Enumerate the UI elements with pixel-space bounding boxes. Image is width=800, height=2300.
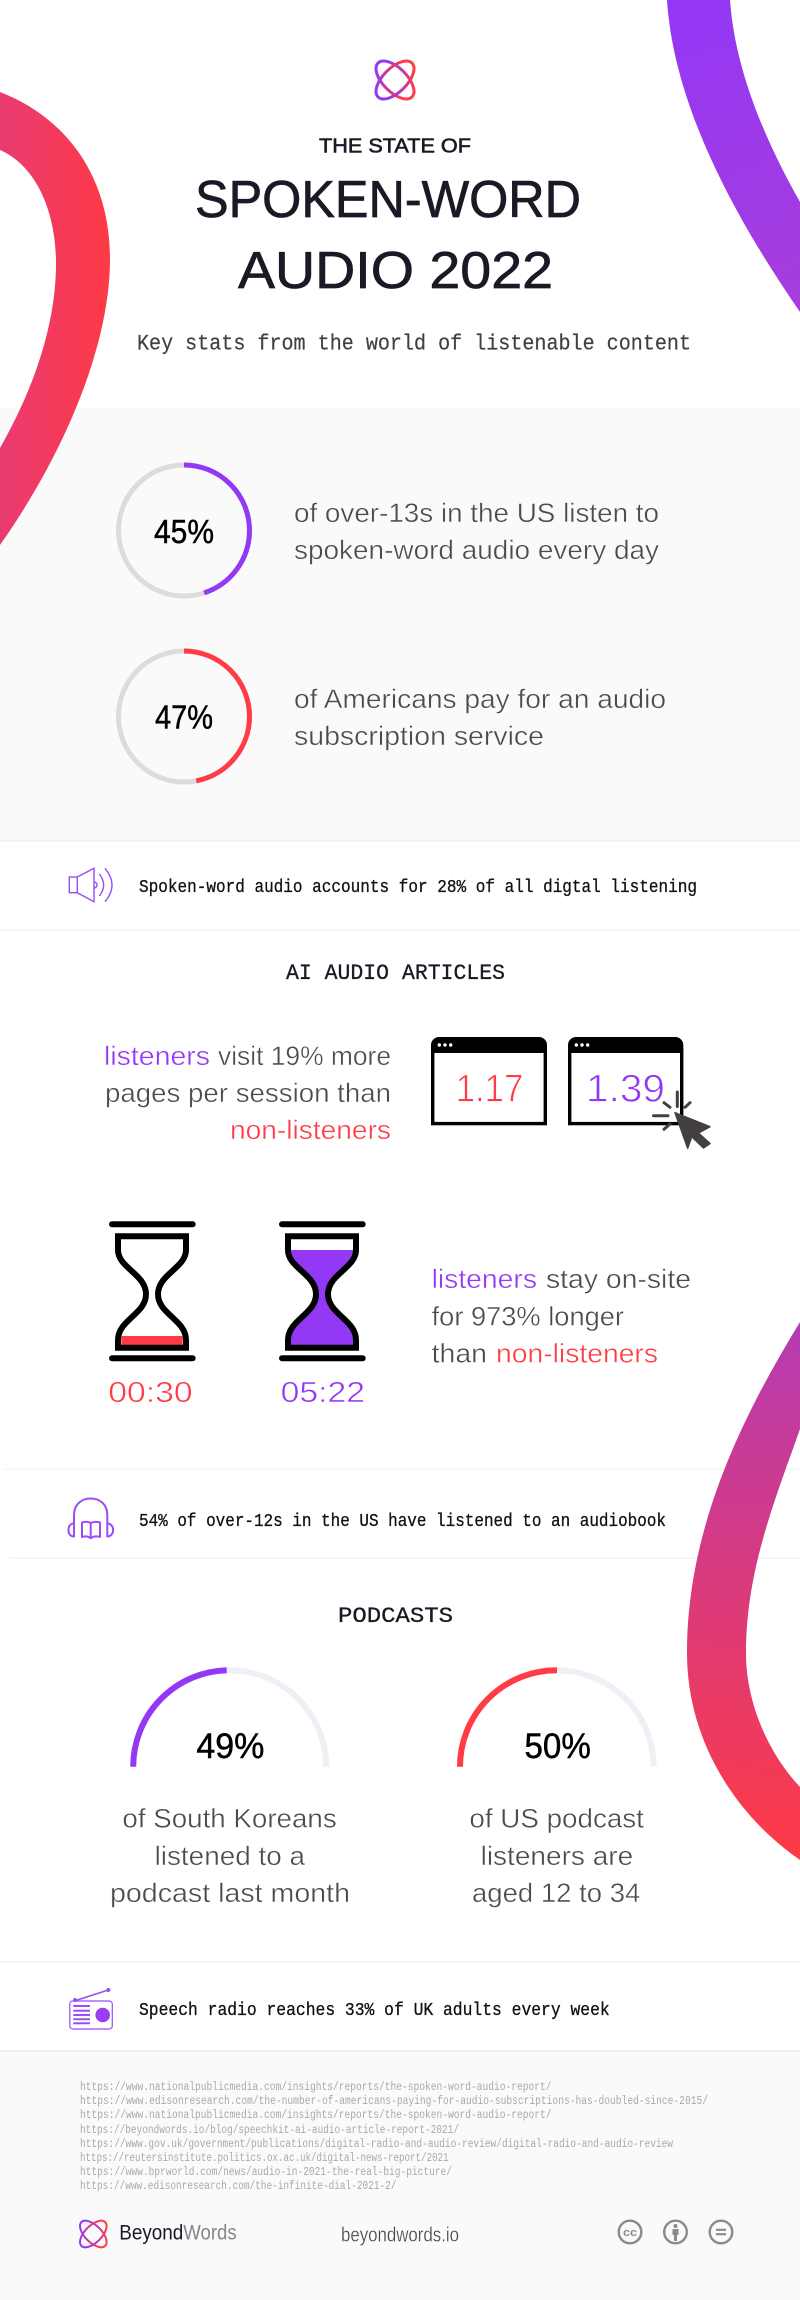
text: 47% description [294, 684, 666, 751]
text: pages per session: non-listeners [230, 1115, 391, 1145]
text: sources: https://www.gov.uk/government/publications/digital-radio-and-audio-review/digital-radio-and-audio-review [80, 2138, 673, 2151]
text: time on site [432, 1264, 691, 1369]
text: pages per session: listeners [104, 1041, 210, 1071]
text: 45% description: spoken-word audio every day [294, 535, 660, 565]
heading: podcasts: PODCASTS [338, 1604, 453, 1629]
icon: browser window 1.17: 1.17 [456, 1068, 523, 1111]
icon: hourglass red [112, 1224, 193, 1358]
icon: headphones book [68, 1498, 113, 1538]
text: 50% description: of US podcast [469, 1804, 645, 1834]
donut: 47% [118, 651, 250, 782]
text: sources: https://www.nationalpublicmedia.com/insights/reports/the-spoken-word-audio-report/ [80, 2109, 552, 2122]
panel: daily stats [118, 465, 666, 782]
text: 45% description: of over-13s in the US listen to [294, 498, 659, 528]
text: 50% description [469, 1804, 645, 1908]
text: 49% description [110, 1804, 350, 1908]
callout: digital listening [69, 868, 697, 902]
title: THE STATE OF [319, 134, 471, 158]
title [195, 134, 581, 300]
footer website: beyondwords.io [341, 2225, 459, 2247]
icon: hourglass purple [282, 1224, 363, 1358]
text: time on site: for 973% longer [432, 1302, 624, 1332]
gauge: 49% [133, 1670, 326, 1767]
text: 50% description: listeners are [481, 1841, 633, 1871]
text: 47% description: of Americans pay for an audio [294, 684, 666, 714]
label: 00:30: 00:30 [108, 1377, 193, 1409]
text: sources: https://www.bprworld.com/news/audio-in-2021-the-real-big-picture/ [80, 2166, 452, 2179]
callout: speech radio [70, 1988, 610, 2029]
icons: creative commons licence [619, 2221, 732, 2243]
callout: digital listening: Spoken-word audio accounts for 28% of all digtal listening [139, 877, 697, 898]
text: 49% description: podcast last month [110, 1878, 350, 1908]
text: time on site: non-listeners [496, 1339, 658, 1369]
callout: audiobook: 54% of over-12s in the US have listened to an audiobook [139, 1511, 666, 1532]
text: time on site: listeners [432, 1264, 537, 1294]
text: pages per session: visit 19% more [218, 1041, 391, 1071]
footer logo: Words [183, 2221, 237, 2244]
text: pages per session [104, 1041, 391, 1145]
callout: speech radio: Speech radio reaches 33% of UK adults every week [139, 2000, 610, 2021]
text: sources: https://www.nationalpublicmedia.com/insights/reports/the-spoken-word-audio-report/ [80, 2081, 552, 2094]
text: pages per session: pages per session than [105, 1078, 391, 1108]
icon: BeyondWords logo [370, 55, 420, 105]
icons: creative commons licence: cc [623, 2227, 637, 2239]
text: sources: https://reutersinstitute.politics.ox.ac.uk/digital-news-report/2021 [80, 2152, 449, 2165]
text: time on site: stay on-site [546, 1264, 691, 1294]
gauge: 50% [460, 1670, 654, 1767]
footer logo [75, 2216, 237, 2252]
text: 49% description: listened to a [155, 1841, 305, 1871]
gauge: 50%: 50% [524, 1727, 591, 1766]
subtitle: Key stats from the world of listenable content [137, 332, 691, 356]
heading: AI audio articles: AI AUDIO ARTICLES [286, 961, 505, 986]
label: 05:22: 05:22 [281, 1377, 365, 1409]
donut: 45% [118, 465, 250, 596]
swoosh: left red [0, 92, 110, 545]
text: time on site: than [432, 1339, 487, 1369]
text: 45% description [294, 498, 660, 565]
donut: 45%: 45% [154, 513, 214, 550]
gauge: 49%: 49% [196, 1727, 264, 1766]
swoosh: lower right gradient [687, 1322, 800, 1860]
footer logo: Beyond [119, 2221, 183, 2244]
title: SPOKEN-WORD [195, 171, 581, 229]
text: sources [80, 2081, 708, 2193]
icon: browser window 1.39 [568, 1037, 683, 1124]
text: 49% description: of South Koreans [122, 1804, 337, 1834]
title: AUDIO 2022 [238, 242, 553, 300]
icon: browser window 1.17 [431, 1037, 547, 1124]
text: sources: https://beyondwords.io/blog/speechkit-ai-audio-article-report-2021/ [80, 2124, 459, 2137]
icon: browser window 1.39: 1.39 [586, 1068, 665, 1111]
text: 50% description: aged 12 to 34 [472, 1878, 640, 1908]
icon: radio [70, 1988, 112, 2029]
callout: audiobook [68, 1498, 666, 1538]
text: sources: https://www.edisonresearch.com/the-infinite-dial-2021-2/ [80, 2180, 396, 2193]
swoosh: top right purple [667, 0, 800, 312]
icon: cursor click [654, 1092, 710, 1148]
donut: 47%: 47% [155, 698, 213, 736]
text: 47% description: subscription service [294, 721, 544, 751]
icon: speaker [69, 868, 112, 902]
